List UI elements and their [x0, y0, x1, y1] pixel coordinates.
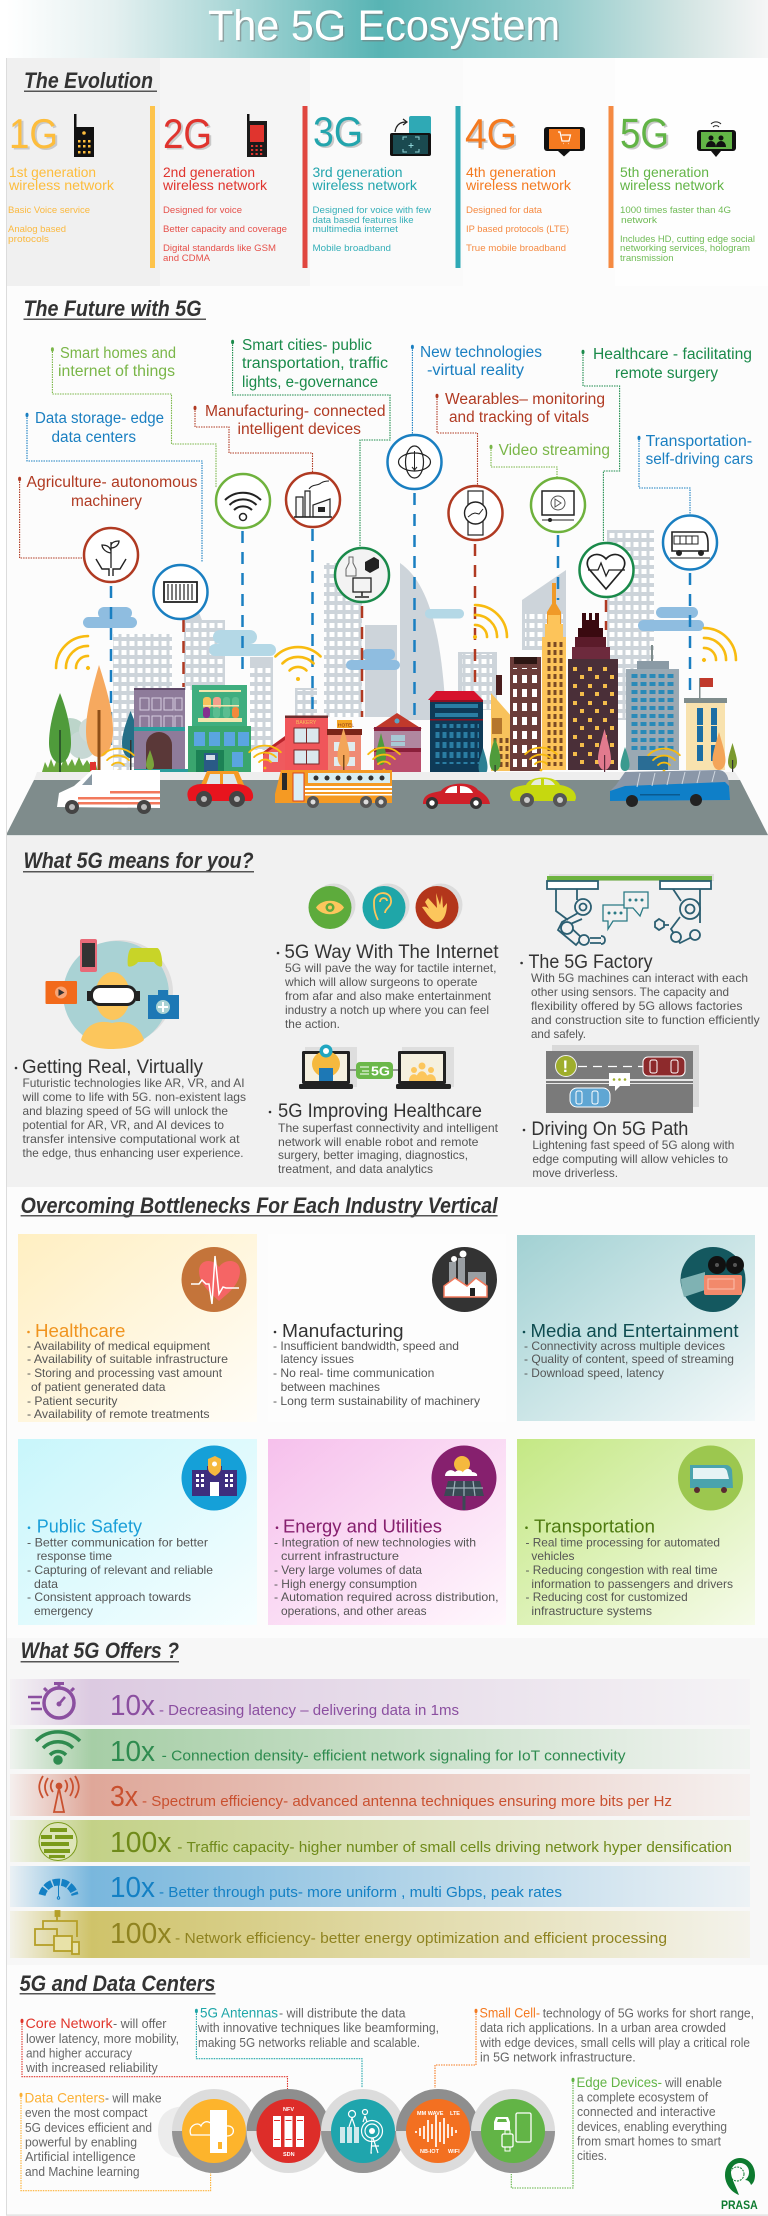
ring: small cell: MM WAVE — [417, 2111, 444, 2117]
icon: police building — [182, 1446, 246, 1510]
callout: data storage: Data storage- edge — [35, 410, 164, 427]
card: healthcare: Healthcare — [35, 1320, 125, 1341]
text: getting real, virtually: the edge, thus enhancing user experience. — [22, 1146, 244, 1160]
column: 5G: transmission — [620, 253, 674, 264]
text: 5G improving healthcare: 5G Improving Healthcare — [278, 1101, 482, 1122]
card: transportation: information to passengers and drivers — [531, 1577, 733, 1591]
band: spectrum efficiency: - Spectrum efficiency- advanced antenna techniques ensuring more bits per Hz — [142, 1794, 672, 1810]
ring: data centers — [172, 2089, 256, 2173]
callout: data centers: - will make — [105, 2092, 162, 2106]
ring: small cell: LTE — [450, 2111, 460, 2117]
callout: new technologies: New technologies — [420, 344, 542, 361]
card: transportation: Transportation — [534, 1516, 655, 1537]
callout: data centers: 5G devices efficient and — [25, 2121, 152, 2135]
card: public safety: - Capturing of relevant and reliable — [27, 1563, 213, 1577]
ring: core network — [246, 2089, 330, 2173]
column: 3G: data based features like — [312, 215, 414, 226]
column: 2G: and CDMA — [163, 253, 211, 264]
column: 5G: 5G — [620, 110, 669, 156]
column: 3G — [311, 108, 431, 254]
card: transportation: - Reducing congestion with real time — [526, 1563, 718, 1577]
callout: data centers: even the most compact — [25, 2106, 148, 2120]
text: 5G way with the internet: 5G Way With The Internet — [284, 942, 499, 963]
vehicle: lime car — [510, 778, 576, 807]
ring: small cell — [396, 2089, 480, 2173]
callout: core network: with increased reliability — [25, 2061, 158, 2075]
maroon skyscraper — [568, 613, 618, 770]
text: the 5G factory: other using sensors. The capacity and — [531, 985, 729, 999]
callout: 5G antennas — [195, 2005, 439, 2088]
trees foreground — [478, 738, 500, 778]
column: 4G: wireless network — [465, 177, 572, 193]
icon: smartwatch circle — [448, 486, 502, 540]
callout: small cell: with edge devices, small cells will play a critical role — [479, 2036, 750, 2050]
icon: bus — [678, 1446, 743, 1510]
card: transportation: - Real time processing for automated — [526, 1536, 720, 1550]
card: manufacturing: - Insufficient bandwidth, speed and — [273, 1339, 459, 1353]
column: 5G: 5th generation — [620, 164, 709, 180]
column: 5G: networking services, hologram — [620, 243, 750, 254]
ring: small cell: NB-IOT — [420, 2149, 440, 2155]
panel: the future with 5G — [6, 286, 768, 835]
callout: edge devices: Edge Devices- — [576, 2074, 662, 2090]
icon: circuit — [39, 1822, 77, 1860]
card: healthcare: - Availability of medical equipment — [27, 1339, 211, 1353]
card: manufacturing: - No real- time communication — [273, 1366, 434, 1380]
card: public safety: - Consistent approach towards — [27, 1590, 191, 1604]
card: energy and utilities: - Automation required across distribution, — [274, 1590, 499, 1604]
icon: 5G factory robots — [547, 874, 714, 945]
title: The 5G Ecosystem — [208, 2, 560, 50]
bakery — [263, 716, 328, 773]
text: getting real, virtually: will come to life with 5G. non-existent lags — [21, 1090, 246, 1104]
icon: film camera — [680, 1247, 746, 1312]
callout: healthcare: Healthcare - facilitating — [593, 346, 752, 363]
icon: 5G tablet — [697, 122, 736, 157]
text: getting real, virtually: Futuristic technologies like AR, VR, and AI — [22, 1076, 244, 1090]
band: latency: 10x — [110, 1690, 155, 1722]
callout: 5G antennas: making 5G networks reliable and scalable. — [198, 2036, 420, 2050]
card: healthcare: of patient generated data — [31, 1380, 166, 1394]
band: network efficiency — [10, 1911, 750, 1958]
callout: manufacturing: intelligent devices — [238, 421, 361, 438]
icon: virtual reality circle — [388, 435, 442, 489]
icon: telemedicine laptops: 5G — [371, 1064, 390, 1078]
ring: core network: SDN — [283, 2152, 295, 2158]
column: 5G: wireless network — [619, 177, 725, 193]
callout: smart cities: transportation, traffic — [242, 355, 388, 372]
text: 5G way with the internet: from afar and also make entertainment — [285, 989, 492, 1003]
callout: edge devices — [511, 2074, 727, 2188]
callout: edge devices: connected and interactive — [577, 2105, 716, 2119]
text: getting real, virtually: transfer intensive computational work at — [22, 1132, 240, 1146]
icon: smart city circle — [335, 548, 389, 602]
text: the 5G factory: and safely. — [531, 1027, 586, 1041]
text: driving on 5G path — [523, 1119, 734, 1180]
text: 5G way with the internet — [277, 942, 499, 1031]
card: public safety — [18, 1439, 257, 1625]
card: media and entertainment: - Connectivity across multiple devices — [524, 1339, 725, 1353]
text: 5G improving healthcare: network will enable robot and remote — [278, 1135, 479, 1149]
column: 1G: wireless network — [8, 177, 115, 193]
column: 2G: 2G — [163, 110, 212, 157]
callout: wearables: and tracking of vitals — [449, 409, 589, 426]
band: connection density: - Connection density- efficient network signaling for IoT connectivity — [162, 1749, 626, 1765]
band: traffic capacity: - Traffic capacity- higher number of small cells driving network hyper densification — [177, 1840, 732, 1856]
dashed connector lines — [111, 493, 690, 750]
callout: smart homes: Smart homes and — [60, 345, 176, 362]
icon: factory circle — [286, 473, 340, 527]
card: manufacturing: latency issues — [281, 1352, 354, 1366]
band: connection density — [10, 1729, 750, 1769]
card: transportation: vehicles — [531, 1549, 574, 1563]
callout: wearables: Wearables– monitoring — [445, 391, 605, 408]
column: 5G: 1000 times faster than 4G — [620, 205, 731, 216]
column: 1G — [8, 110, 115, 245]
callout: data centers: Artificial intelligence — [25, 2150, 136, 2164]
header banner — [6, 0, 768, 58]
vehicle: blue bus — [610, 770, 730, 807]
column: 1G: 1G — [11, 112, 60, 158]
text: 5G improving healthcare: treatment, and data analytics — [278, 1162, 433, 1176]
callout: healthcare: remote surgery — [615, 365, 718, 382]
text: the 5G factory: The 5G Factory — [528, 952, 653, 973]
callout: data centers: Data Centers — [24, 2090, 105, 2106]
ring: core network: NFV — [283, 2107, 294, 2113]
column: 4G: 4G — [467, 112, 519, 158]
heading: what 5G means for you: What 5G means for you? — [24, 848, 254, 873]
column: 2G: 2G — [165, 112, 214, 158]
callout: 5G antennas: - will distribute the data — [279, 2007, 406, 2021]
icon: driving on 5G path: ! — [562, 1057, 568, 1076]
column: 4G: Designed for data — [466, 205, 543, 216]
callout: core network — [20, 2015, 288, 2089]
vehicle: red car — [187, 771, 253, 807]
callout: data centers: powerful by enabling — [25, 2136, 137, 2150]
clouds — [83, 607, 704, 670]
text: getting real, virtually — [15, 1057, 246, 1160]
icon: heart monitor — [182, 1247, 246, 1312]
callout: transportation: self-driving cars — [646, 451, 753, 468]
card: healthcare: - Availability of remote treatments — [27, 1407, 210, 1421]
text: getting real, virtually: and blazing speed of 5G will unlock the — [22, 1104, 228, 1118]
column: 3G: Mobile broadband — [312, 243, 391, 254]
callout: agriculture: machinery — [71, 493, 142, 510]
column: 3G: Designed for voice with few — [312, 205, 431, 216]
card: manufacturing: Manufacturing — [282, 1320, 404, 1341]
column: 1G: 1st generation — [9, 164, 96, 180]
callout: data storage — [26, 410, 202, 562]
card: manufacturing — [268, 1234, 506, 1422]
card: energy and utilities: - Integration of new technologies with — [274, 1536, 476, 1550]
column: 2G: wireless network — [162, 177, 268, 193]
icon: 1G phone — [74, 114, 94, 157]
icon: agriculture circle — [84, 528, 138, 582]
icon: heart circle — [580, 543, 634, 597]
icon: driving on 5G path — [546, 1045, 699, 1113]
icon: eye ear hand — [308, 884, 462, 929]
hotel — [327, 720, 362, 771]
column: 4G: IP based protocols (LTE) — [466, 224, 569, 235]
text: getting real, virtually: Getting Real, Virtually — [22, 1057, 203, 1078]
callout: small cell: data rich applications. In a urban area crowded — [480, 2021, 726, 2035]
column: 5G — [619, 110, 755, 264]
callout: data centers — [20, 2090, 211, 2191]
callout: core network: - will offer — [113, 2017, 166, 2031]
callout: new technologies — [411, 344, 542, 434]
text: the 5G factory — [520, 952, 760, 1041]
ring: small cell: WIFI — [448, 2149, 460, 2155]
panel: 5G and data centers — [6, 1965, 768, 2215]
band: network efficiency: 100x — [110, 1918, 172, 1950]
callout: video streaming: Video streaming — [499, 442, 610, 459]
vehicle: red beetle — [423, 784, 490, 809]
text: 5G way with the internet: the action. — [285, 1017, 340, 1031]
wifi signals — [49, 598, 743, 685]
callout: 5G antennas: with innovative techniques like beamforming, — [197, 2021, 439, 2035]
panel: what 5G offers — [6, 1638, 768, 1965]
vehicle: school bus — [275, 770, 392, 808]
ring: 5G antennas — [321, 2089, 405, 2173]
column: 1G: 1G — [9, 110, 58, 157]
callout: new technologies: -virtual reality — [427, 362, 524, 379]
column: 4G: 4th generation — [466, 164, 556, 180]
card: energy and utilities: operations, and other areas — [281, 1604, 427, 1618]
city background buildings — [113, 530, 654, 770]
coloured buildings — [42, 583, 737, 780]
heading: what 5G offers: What 5G Offers ? — [21, 1638, 179, 1663]
navy building — [428, 691, 483, 772]
heading: 5G and data centers: 5G and Data Centers — [20, 1971, 215, 1996]
title: The 5G Ecosystem — [210, 4, 562, 52]
callout: small cell: Small Cell- — [480, 2005, 540, 2021]
text: driving on 5G path: move driverless. — [532, 1166, 618, 1180]
text: 5G improving healthcare — [269, 1101, 499, 1176]
callout: transportation — [638, 433, 753, 514]
column: 3G: multimedia internet — [312, 224, 398, 235]
panel: overcoming bottlenecks — [6, 1187, 768, 1638]
column: 1G: Basic Voice service — [8, 205, 90, 216]
callout: small cell: technology of 5G works for short range, — [543, 2007, 754, 2021]
callout: smart homes: internet of things — [58, 363, 175, 380]
road — [6, 772, 768, 835]
blue-grey office — [598, 645, 679, 780]
vehicle: ambulance — [57, 762, 160, 814]
card: energy and utilities: - Very large volumes of data — [274, 1563, 422, 1577]
text: the 5G factory: and construction site to function efficiently — [531, 1013, 760, 1027]
icon: telemedicine laptops — [299, 1044, 454, 1089]
trees behind — [42, 665, 139, 774]
column: 5G: Includes HD, cutting edge social — [620, 234, 755, 245]
icon: data storage circle — [154, 565, 208, 619]
bakery: BAKERY — [296, 720, 317, 726]
callout: smart cities: lights, e-governance — [242, 374, 378, 391]
callout: wearables — [436, 391, 605, 485]
text: 5G way with the internet: 5G will pave the way for tactile internet, — [285, 961, 496, 975]
card: energy and utilities: - High energy consumption — [274, 1577, 417, 1591]
column: 3G: wireless network — [311, 177, 418, 193]
column: 2G — [162, 110, 287, 264]
icon: factory — [432, 1247, 497, 1312]
column: 2G: 2nd generation — [163, 164, 255, 180]
band: latency: - Decreasing latency – delivering data in 1ms — [159, 1703, 459, 1719]
card: media and entertainment: Media and Entertainment — [530, 1320, 739, 1341]
callout: small cell: in 5G network infrastructure. — [480, 2051, 636, 2065]
card: transportation: - Reducing cost for customized — [526, 1590, 688, 1604]
card: media and entertainment — [517, 1235, 755, 1421]
band: traffic capacity — [10, 1820, 750, 1862]
callout: smart cities: Smart cities- public — [242, 337, 372, 354]
icon: wifi circle — [216, 474, 270, 528]
panel: what 5G means for you — [6, 835, 768, 1187]
text: 5G improving healthcare: The superfast connectivity and intelligent — [278, 1121, 499, 1135]
band: traffic capacity: 100x — [110, 1827, 172, 1859]
icon: bus circle — [663, 516, 717, 570]
street wifi signals — [102, 746, 680, 772]
card: healthcare: - Availability of suitable infrastructure — [27, 1352, 228, 1366]
icon: video circle — [531, 478, 585, 532]
card: public safety: response time — [37, 1549, 112, 1563]
callout: video streaming — [490, 442, 610, 477]
heading: the future with 5G: The Future with 5G — [24, 296, 202, 321]
callout: core network: Core Network — [26, 2015, 114, 2031]
column: 2G: Digital standards like GSM — [163, 243, 276, 254]
callout: edge devices: from smart homes to smart — [577, 2135, 721, 2149]
column: 3G: 3G — [315, 110, 365, 156]
text: the 5G factory: flexibility offered by 5G allows factories — [531, 999, 742, 1013]
callout: edge devices: devices, enabling everything — [577, 2120, 727, 2134]
hotel: HOTEL — [338, 722, 354, 728]
card: public safety: Public Safety — [37, 1516, 143, 1537]
column: 1G: Analog based — [8, 224, 66, 235]
heading: the evolution: The Evolution — [24, 68, 153, 93]
icon: antenna — [39, 1776, 79, 1812]
card: transportation: infrastructure systems — [531, 1604, 652, 1618]
icon: 3G phone rotate — [390, 116, 431, 156]
icon: 2G phone — [247, 114, 267, 157]
card: healthcare: - Storing and processing vast amount — [27, 1366, 223, 1380]
column: 4G: 4G — [465, 110, 517, 157]
callout: smart homes — [51, 345, 216, 487]
text: the 5G factory: With 5G machines can interact with each — [531, 971, 748, 985]
purple building — [134, 688, 188, 773]
callout: healthcare — [582, 346, 752, 541]
icon: devices — [35, 1911, 79, 1954]
band: throughput: 10x — [110, 1872, 155, 1904]
icon: stopwatch — [28, 1684, 74, 1718]
band: network efficiency: - Network efficiency- better energy optimization and efficient processing — [175, 1931, 667, 1947]
logo: PRASA — [721, 2158, 758, 2212]
ring: edge devices — [471, 2089, 555, 2173]
text: 5G improving healthcare: surgery, better imaging, diagnostics, — [278, 1148, 468, 1162]
band: latency — [10, 1679, 750, 1725]
card: media and entertainment: - Quality of content, speed of streaming — [524, 1352, 734, 1366]
band: connection density: 10x — [110, 1736, 155, 1768]
callout: edge devices: cities. — [577, 2149, 607, 2163]
band: spectrum efficiency: 3x — [110, 1781, 138, 1813]
card: public safety: emergency — [34, 1604, 93, 1618]
panel: the evolution — [6, 58, 768, 286]
chain of technology circles — [158, 2089, 555, 2173]
callout: small cell — [435, 2005, 754, 2088]
column: 3G: 3G — [313, 108, 363, 155]
card: transportation — [517, 1439, 755, 1625]
brown building — [510, 657, 541, 771]
column: 5G: 5G — [622, 111, 671, 158]
icon: 4G tablet with cart — [544, 127, 585, 156]
callout: data centers: and Machine learning — [25, 2165, 140, 2179]
card: media and entertainment: - Download speed, latency — [524, 1366, 664, 1380]
column: 4G — [465, 110, 585, 254]
icon: virtual reality user — [46, 939, 179, 1049]
orange narrow building — [491, 675, 513, 771]
callout: agriculture: Agriculture- autonomous — [26, 474, 198, 491]
column: 3G: 3rd generation — [312, 164, 402, 180]
column: 2G: Designed for voice — [163, 205, 242, 216]
callout: edge devices: a complete ecosystem of — [577, 2091, 708, 2105]
card: manufacturing: - Long term sustainability of machinery — [273, 1394, 480, 1408]
logo: PRASA: PRASA — [721, 2200, 758, 2212]
callout: manufacturing — [194, 403, 386, 472]
card: energy and utilities: current infrastructure — [281, 1549, 399, 1563]
cream building — [684, 678, 737, 777]
icon: gauge — [42, 1882, 75, 1899]
heading: overcoming bottlenecks: Overcoming Bottlenecks For Each Industry Vertical — [21, 1193, 498, 1218]
icon: wifi — [36, 1732, 80, 1763]
band: spectrum efficiency — [10, 1774, 750, 1816]
column: 1G: protocols — [8, 234, 49, 245]
column: 2G: Better capacity and coverage — [163, 224, 287, 235]
card: energy and utilities: Energy and Utilities — [283, 1516, 442, 1537]
pink house — [373, 713, 422, 772]
callout: manufacturing: Manufacturing- connected — [205, 403, 386, 420]
callout: edge devices: will enable — [664, 2076, 722, 2090]
column: 4G: True mobile broadband — [466, 243, 566, 254]
card: energy and utilities — [268, 1439, 506, 1625]
card: public safety: - Better communication for better — [27, 1536, 208, 1550]
text: driving on 5G path: edge computing will allow vehicles to — [532, 1152, 728, 1166]
icon: solar panel — [432, 1446, 496, 1510]
callout: 5G antennas: 5G Antennas — [200, 2005, 278, 2021]
callout: agriculture — [18, 474, 198, 558]
yellow tower — [542, 583, 566, 770]
text: 5G way with the internet: industry a notch up where you can feel — [285, 1003, 489, 1017]
callout: transportation: Transportation- — [646, 433, 752, 450]
text: 5G way with the internet: which will allow surgeons to operate — [284, 975, 478, 989]
column: 5G: network — [621, 215, 657, 226]
card: public safety: data — [34, 1577, 58, 1591]
callout: smart cities — [231, 337, 390, 547]
card: healthcare: - Patient security — [27, 1394, 118, 1408]
text: driving on 5G path: Driving On 5G Path — [531, 1119, 688, 1140]
green building — [188, 685, 251, 773]
callout: core network: and higher accuracy — [26, 2047, 133, 2061]
card: manufacturing: between machines — [281, 1380, 380, 1394]
callout: data storage: data centers — [52, 429, 136, 446]
text: getting real, virtually: potential for AR, VR, and AI devices to — [22, 1118, 224, 1132]
text: driving on 5G path: Lightening fast speed of 5G along with — [532, 1138, 734, 1152]
band: throughput — [10, 1866, 750, 1907]
callout: core network: lower latency, more mobility, — [26, 2032, 179, 2046]
band: throughput: - Better through puts- more uniform , multi Gbps, peak rates — [159, 1885, 562, 1901]
card: healthcare — [18, 1234, 257, 1422]
